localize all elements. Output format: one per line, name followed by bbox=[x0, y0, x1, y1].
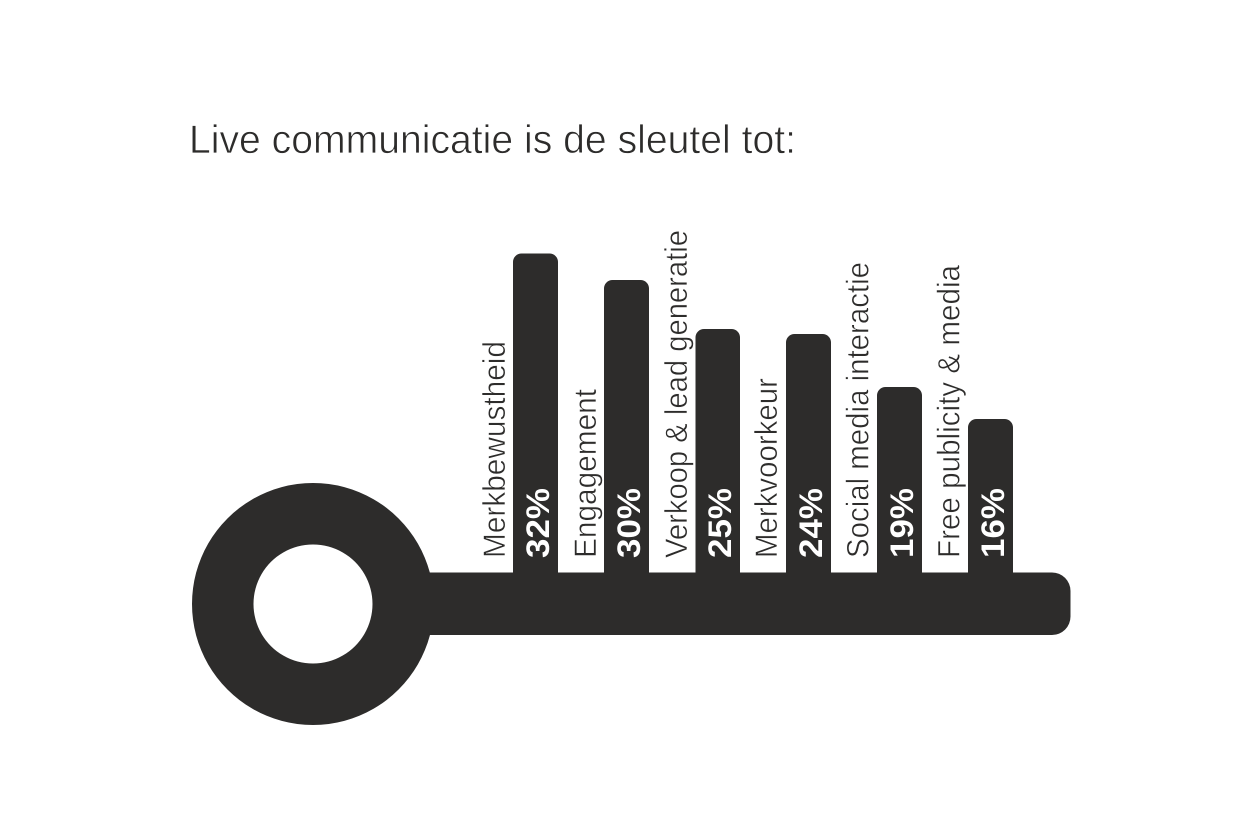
value: 19%: 19% bbox=[884, 488, 920, 558]
label: Social media interactie: Social media interactie bbox=[840, 262, 876, 558]
label: Free publicity & media: Free publicity & media bbox=[930, 265, 966, 558]
bar: Verkoop & lead generatie bbox=[696, 329, 740, 580]
value: 30%: 30% bbox=[611, 488, 647, 558]
title: Live communicatie is de sleutel tot: bbox=[189, 118, 796, 162]
value: 24%: 24% bbox=[793, 488, 829, 558]
label: Merkvoorkeur: Merkvoorkeur bbox=[748, 378, 784, 558]
label: Merkbewustheid: Merkbewustheid bbox=[476, 341, 512, 558]
key shaft bbox=[420, 572, 1070, 635]
key ring bbox=[192, 483, 434, 725]
bar: Engagement bbox=[604, 280, 649, 580]
bar: Merkbewustheid bbox=[513, 254, 558, 580]
value: 25%: 25% bbox=[702, 488, 738, 558]
value: 16%: 16% bbox=[975, 488, 1011, 558]
value: 32%: 32% bbox=[520, 488, 556, 558]
bar: Free publicity & media bbox=[968, 419, 1013, 580]
label: Verkoop & lead generatie: Verkoop & lead generatie bbox=[658, 230, 694, 558]
bar: Merkvoorkeur bbox=[786, 334, 831, 580]
key shape bbox=[192, 254, 1070, 725]
label: Engagement: Engagement bbox=[567, 389, 603, 558]
bar: Social media interactie bbox=[877, 387, 922, 580]
